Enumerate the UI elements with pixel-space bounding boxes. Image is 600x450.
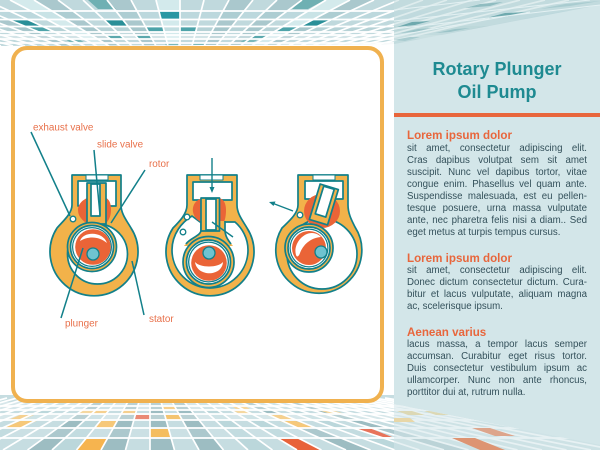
highlighted tiles	[8, 0, 333, 46]
text block 1	[407, 143, 587, 238]
slide valve	[201, 198, 220, 231]
text block 1: Cras dapibus volutpat sem sit amet	[407, 155, 587, 166]
orange chamber caps	[193, 198, 226, 222]
upper chamber	[193, 182, 232, 200]
slide valve	[309, 184, 338, 225]
text block 1: congue enim. Phasellus vel quam ante.	[407, 179, 587, 190]
text block 2: Donec dictum consectetur dictum. Cura-	[407, 277, 587, 288]
text block 2: ac, scelerisque ipsum.	[407, 301, 503, 312]
rotor	[285, 224, 333, 272]
text block 1: ante, nec pharetra felis nisi a diam.. Sed	[407, 215, 587, 226]
stator cavity	[172, 216, 248, 288]
arrow: inlet down	[210, 158, 214, 193]
panel: diagram card	[11, 46, 384, 403]
text block 1: Suspendisse malesuada, est eu pellen-	[407, 191, 587, 202]
orange chamber cap	[304, 194, 340, 228]
exhaust hole	[70, 216, 76, 222]
labels: stator	[149, 314, 174, 325]
heading 3: Aenean varius	[407, 326, 486, 339]
text block 3	[407, 339, 587, 398]
title: Rotary Plunger	[432, 59, 562, 79]
text block 2: bitur et lacus vulputate, aliquam magna	[407, 289, 587, 300]
labels	[33, 122, 174, 330]
arrow: outlet diagonal	[212, 222, 233, 237]
heading 1: Lorem ipsum dolor	[407, 129, 512, 142]
upper chamber	[305, 181, 343, 199]
heading 2: Lorem ipsum dolor	[407, 252, 512, 265]
neck	[184, 221, 233, 246]
text block 2	[407, 265, 587, 312]
labels: plunger	[65, 318, 99, 330]
stator body	[50, 175, 138, 296]
text block 3: Duis consectetur vestibulum ipsum ac	[407, 363, 587, 374]
text block 1: sit amet, consectetur adipiscing elit.	[407, 143, 587, 154]
pump 3	[276, 175, 362, 293]
labels: rotor	[149, 159, 170, 170]
arrow: exhaust out	[269, 202, 293, 211]
stator body	[276, 175, 362, 293]
top slot	[313, 175, 335, 180]
stator body	[166, 175, 254, 296]
rotor	[183, 236, 234, 288]
top slot	[86, 175, 108, 180]
orange chamber caps	[78, 197, 111, 225]
text block 3: ullamcorper. Nunc non ante rhoncus,	[407, 375, 587, 386]
text block 1: suscipit. Nunc vel dapibus tortor, vitae	[407, 167, 587, 178]
text block 1: tesque posuere, urna massa vulputate	[407, 203, 587, 214]
stator cavity	[287, 219, 357, 289]
text block 3: accumsan. Curabitur eget risus tortor.	[407, 351, 587, 362]
rotor	[68, 222, 116, 272]
divider bar	[394, 113, 600, 117]
exhaust hole	[297, 212, 303, 218]
highlighted floor tiles	[3, 405, 392, 450]
text block 3: porttitor dui at, rutrum nulla.	[407, 387, 525, 398]
text block 2: sit amet, consectetur adipiscing elit.	[407, 265, 587, 276]
stator cavity	[68, 224, 128, 284]
labels: slide valve	[97, 140, 144, 150]
upper chamber	[78, 181, 116, 206]
labels: exhaust valve	[33, 122, 94, 134]
bottom perspective tile floor	[0, 395, 600, 450]
slide valve	[87, 183, 106, 224]
pump 2	[166, 175, 254, 296]
title: Oil Pump	[457, 82, 536, 102]
pump 1	[50, 175, 138, 296]
streaks at top of sidebar	[394, 0, 600, 44]
top slot	[200, 175, 223, 180]
text block 3: lacus massa, a tempor lacus semper	[407, 339, 587, 350]
panel: right sidebar background	[394, 0, 600, 450]
leader lines	[31, 132, 145, 318]
text block 1: eget metus at turpis tempus cursus.	[407, 227, 560, 238]
title	[432, 59, 562, 102]
holes	[184, 214, 190, 220]
